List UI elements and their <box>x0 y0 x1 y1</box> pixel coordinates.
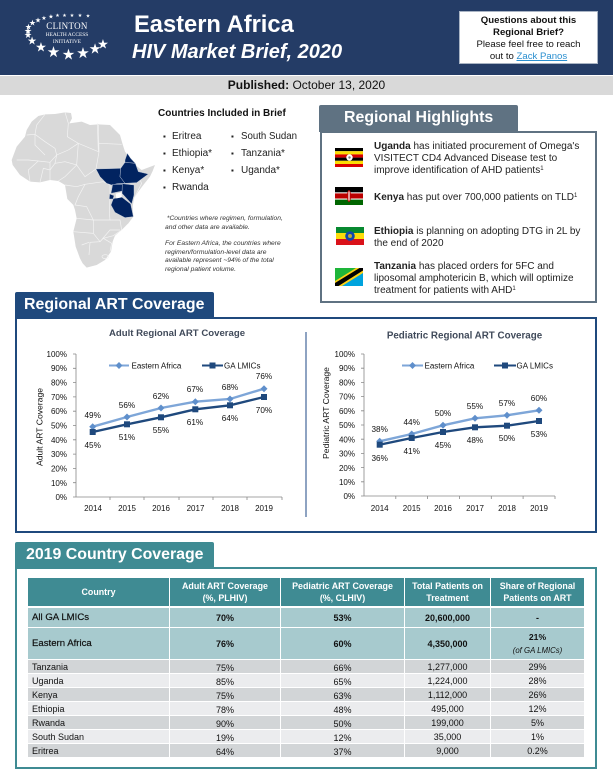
y axis: 90% <box>339 364 355 373</box>
row: Ethiopia: 495,000 <box>431 704 464 714</box>
footnote: data availability: and other data are available. <box>165 224 250 230</box>
row: Ethiopia: Ethiopia <box>32 704 65 714</box>
legend: Eastern Africa <box>424 362 475 370</box>
legend: GA LMICs <box>224 362 260 370</box>
heading: regional ART coverage <box>15 292 214 318</box>
y axis: 20% <box>51 464 67 474</box>
subtitle: HIV Market Brief, 2020 <box>132 41 342 63</box>
row: Ethiopia: 12% <box>528 704 546 714</box>
panel: regional highlights <box>320 131 597 303</box>
y axis: 100% <box>335 350 355 359</box>
legend <box>109 362 260 370</box>
countries list: ▪ <box>163 166 166 175</box>
table header: (%, PLHIV) <box>203 593 247 603</box>
y axis: 80% <box>339 378 355 388</box>
row: Tanzania: 29% <box>528 662 546 672</box>
x axis labels: 2019 <box>255 504 273 513</box>
header banner <box>0 0 613 75</box>
data labels: 45% <box>435 441 451 450</box>
row: Tanzania: 75% <box>216 663 234 673</box>
countries list: Tanzania* <box>241 148 285 159</box>
callout: questions contact <box>459 11 598 64</box>
y axis: 0% <box>343 492 355 501</box>
data labels: 60% <box>531 394 547 403</box>
heading: 2019 country coverage <box>15 542 214 568</box>
logo: Clinton Health Access Initiative: CLINTON <box>46 21 88 31</box>
table: country coverage <box>28 578 584 757</box>
countries list: South Sudan <box>241 131 297 142</box>
logo: Clinton Health Access Initiative: ★ <box>55 13 60 19</box>
table header: (%, CLHIV) <box>320 593 365 603</box>
row: Rwanda <box>28 716 584 729</box>
table header: Share of Regional <box>500 581 575 591</box>
published date band: Published: October 13, 2020 <box>228 78 385 92</box>
data labels: 70% <box>256 406 272 415</box>
y axis: 60% <box>339 407 355 416</box>
published date band <box>0 76 613 95</box>
row: Kenya: 63% <box>333 691 352 701</box>
logo: Clinton Health Access Initiative: ★ <box>86 14 91 20</box>
text: Tanzania highlight: Tanzania has placed orders for 5FC and <box>374 261 554 272</box>
y axis: 50% <box>339 421 355 430</box>
logo: Clinton Health Access Initiative: ★ <box>29 18 36 28</box>
legend: GA LMICs <box>516 362 553 370</box>
x axis labels: 2016 <box>152 504 170 513</box>
data labels: 67% <box>187 385 203 394</box>
row: Uganda: 65% <box>333 677 352 687</box>
row: Uganda: 1,224,000 <box>427 676 468 686</box>
y axis: 70% <box>339 392 355 402</box>
logo: Clinton Health Access Initiative: ★ <box>41 15 47 22</box>
title: Eastern Africa <box>134 12 294 38</box>
callout: questions contact: out to Zack Panos <box>490 51 567 62</box>
row: Rwanda: 5% <box>531 718 544 728</box>
y axis: 20% <box>339 464 355 473</box>
logo: Clinton Health Access Initiative: ★ <box>76 45 90 62</box>
footnote: patient volume: regional patient volume. <box>165 266 236 272</box>
callout: questions contact: Questions about this <box>481 15 576 26</box>
row: Kenya: 75% <box>216 691 234 701</box>
callout: questions contact: Regional Brief? <box>493 27 564 38</box>
data labels: 50% <box>499 434 515 443</box>
chart: adult regional ART coverage <box>34 328 282 513</box>
table header: Patients on ART <box>503 593 572 603</box>
data labels: 41% <box>404 447 420 456</box>
text: Uganda highlight <box>374 141 579 176</box>
row: All GA LMICs: 20,600,000 <box>425 612 470 622</box>
row: Eastern Africa: 4,350,000 <box>427 638 468 648</box>
legend <box>402 362 553 370</box>
row: South Sudan: South Sudan <box>32 732 84 742</box>
y axis: 90% <box>51 364 67 373</box>
table header: Country <box>81 587 116 597</box>
row: Eritrea: 64% <box>216 747 234 757</box>
row: Ethiopia: 78% <box>216 705 234 715</box>
data labels <box>372 394 547 463</box>
country borders <box>17 112 142 259</box>
divider between charts <box>305 332 306 517</box>
x axis labels: 2019 <box>530 504 548 513</box>
x axis labels: 2015 <box>118 504 136 513</box>
legend: Eastern Africa <box>132 362 182 370</box>
logo: Clinton Health Access Initiative: ★ <box>48 13 54 20</box>
logo: Clinton Health Access Initiative: HEALTH ACCESS <box>46 32 88 38</box>
countries list: ▪ <box>163 149 166 158</box>
text: Ethiopia highlight <box>374 226 580 249</box>
footnote: data availability <box>165 215 283 230</box>
x axis labels: 2017 <box>187 504 205 513</box>
row: Uganda: Uganda <box>32 676 64 686</box>
text: Kenya highlight: Kenya has put over 700,000 patients on TLD1 <box>374 192 577 203</box>
chart title: Pediatric Regional ART Coverage <box>387 330 543 342</box>
icon: Tanzania flag <box>335 268 363 286</box>
text: Uganda highlight: VISITECT CD4 Advanced Disease test to <box>374 153 557 164</box>
row: Eritrea <box>28 744 584 757</box>
data labels: 44% <box>404 418 420 427</box>
row: South Sudan: 1% <box>531 732 544 742</box>
row: Uganda: 85% <box>216 677 234 687</box>
panel: regional ART coverage <box>15 317 597 533</box>
table header: Treatment <box>426 593 469 603</box>
row: Tanzania <box>28 660 584 673</box>
row: Tanzania: Tanzania <box>32 662 68 672</box>
series: GA LMICs <box>90 394 267 435</box>
row: Eastern Africa: 21% <box>529 632 546 642</box>
logo: Clinton Health Access Initiative: ★ <box>35 40 47 54</box>
heading: regional highlights <box>319 105 518 132</box>
table header: Total Patients on <box>412 581 483 591</box>
data labels: 49% <box>85 411 101 420</box>
row: Eritrea: 0.2% <box>527 746 548 756</box>
row: Eastern Africa: (of GA LMICs) <box>513 646 562 654</box>
data labels: 56% <box>119 401 135 410</box>
footnote: patient volume <box>165 240 281 272</box>
logo: Clinton Health Access Initiative: ★ <box>70 13 75 19</box>
logo: Clinton Health Access Initiative: ★ <box>62 13 67 19</box>
text: Tanzania highlight <box>374 261 574 296</box>
countries list: Uganda* <box>241 165 280 176</box>
countries list: Ethiopia* <box>172 148 212 159</box>
logo: Clinton Health Access Initiative: ★ <box>24 26 32 36</box>
x axis labels: 2017 <box>466 504 484 513</box>
x axis labels <box>84 504 273 513</box>
row: All GA LMICs: - <box>536 612 539 622</box>
row: Rwanda: 199,000 <box>431 718 464 728</box>
y axis <box>335 350 555 501</box>
y axis: 60% <box>51 407 67 416</box>
logo: Clinton Health Access Initiative: ★ <box>24 30 32 40</box>
y axis: 100% <box>47 350 67 359</box>
data labels: 68% <box>222 383 238 392</box>
logo: Clinton Health Access Initiative <box>24 13 109 63</box>
row: South Sudan: 35,000 <box>434 732 461 742</box>
row: All GA LMICs: All GA LMICs <box>32 612 89 623</box>
row: Kenya: 26% <box>528 690 546 700</box>
data labels: 38% <box>372 425 388 434</box>
footnote: data availability: *Countries where regimen, formulation, <box>167 215 283 222</box>
logo: Clinton Health Access Initiative: ★ <box>89 41 101 57</box>
row: Eritrea: Eritrea <box>32 746 59 756</box>
y axis <box>47 350 282 502</box>
row: All GA LMICs <box>28 608 584 627</box>
row: Eastern Africa: 60% <box>333 638 352 648</box>
series: Eastern Africa <box>376 407 542 445</box>
series: Eastern Africa <box>89 385 268 430</box>
icon: Kenya flag <box>335 187 363 205</box>
text: Ethiopia highlight: the end of 2020 <box>374 238 444 249</box>
icon: Uganda flag <box>335 148 363 167</box>
footnote: patient volume: available represent ~94% of the total <box>165 257 274 264</box>
data labels: 76% <box>256 372 272 381</box>
map of Africa <box>12 112 155 268</box>
icon: Ethiopia flag <box>336 227 364 245</box>
heading: regional highlights: Regional Highlights <box>344 109 493 126</box>
y axis: 30% <box>51 450 67 459</box>
y axis: 10% <box>339 478 355 487</box>
table header: Pediatric ART Coverage <box>292 581 393 591</box>
text: Tanzania highlight: liposomal amphotericin B, which will optimize <box>374 273 574 284</box>
continent <box>12 112 155 268</box>
x axis labels: 2018 <box>498 504 516 513</box>
data labels: 64% <box>222 414 238 423</box>
data labels: 45% <box>85 441 101 450</box>
row: Rwanda: 90% <box>216 719 234 729</box>
data labels: 50% <box>435 409 451 418</box>
data labels: 57% <box>499 399 515 408</box>
y axis: 70% <box>51 393 67 402</box>
countries list: ▪ <box>231 166 234 175</box>
row: Rwanda: 50% <box>333 719 352 729</box>
data labels: 55% <box>467 402 483 411</box>
countries list: ▪ <box>231 149 234 158</box>
text: Ethiopia highlight: Ethiopia is planning on adopting DTG in 2L by <box>374 226 580 237</box>
y axis: 80% <box>51 378 67 388</box>
countries list: Eritrea <box>172 131 201 142</box>
row: South Sudan <box>28 730 584 743</box>
row: Kenya: Kenya <box>32 690 58 700</box>
logo: Clinton Health Access Initiative: ★ <box>97 36 109 52</box>
logo: Clinton Health Access Initiative: ★ <box>62 46 75 63</box>
row: South Sudan: 19% <box>216 733 234 743</box>
y axis: 30% <box>339 450 355 458</box>
table header <box>28 578 584 606</box>
list items: ▪ <box>163 132 166 141</box>
row: Uganda: 28% <box>528 676 546 686</box>
logo: Clinton Health Access Initiative: ★ <box>78 13 83 19</box>
y axis: 40% <box>339 436 355 444</box>
row: Tanzania: 66% <box>333 663 352 673</box>
panel: 2019 country coverage <box>15 567 597 769</box>
y axis title: Pediatric ART Coverage <box>321 367 331 459</box>
x axis labels: 2016 <box>434 504 452 513</box>
footnote: patient volume: regimen/formulation-level data are <box>165 248 266 256</box>
text: Uganda highlight: improve identification of AHD patients1 <box>374 165 544 176</box>
row: Eritrea: 9,000 <box>436 746 459 756</box>
logo: Clinton Health Access Initiative: INITIATIVE <box>53 39 82 45</box>
row: All GA LMICs: 70% <box>216 612 234 622</box>
x axis labels: 2015 <box>403 504 421 513</box>
y axis title: Adult ART Coverage <box>34 388 44 466</box>
countries list: Kenya* <box>172 165 204 176</box>
y axis: 40% <box>51 436 67 445</box>
logo: Clinton Health Access Initiative: ★ <box>47 44 60 61</box>
text: Tanzania highlight: treatment for patients with AHD1 <box>374 285 516 296</box>
row: Eastern Africa <box>28 628 584 659</box>
row: Kenya: 1,112,000 <box>428 690 467 700</box>
row: Rwanda: Rwanda <box>32 718 65 728</box>
row: Kenya <box>28 688 584 701</box>
row: Tanzania: 1,277,000 <box>427 662 468 672</box>
x axis labels: 2014 <box>84 504 102 513</box>
row: Eastern Africa: Eastern Africa <box>32 638 92 649</box>
row: Ethiopia <box>28 702 584 715</box>
y axis: 0% <box>55 493 67 502</box>
footnote: patient volume: For Eastern Africa, the countries where <box>165 240 281 247</box>
data labels <box>85 372 272 450</box>
row: South Sudan: 12% <box>333 733 352 743</box>
text: Uganda highlight: Uganda has initiated procurement of Omega's <box>374 141 579 152</box>
y axis: 10% <box>51 479 67 488</box>
logo: Clinton Health Access Initiative: ★ <box>27 36 37 48</box>
data labels: 61% <box>187 418 203 427</box>
countries list <box>158 108 297 193</box>
chart title: Adult Regional ART Coverage <box>109 328 245 339</box>
x axis labels: 2018 <box>221 504 239 513</box>
row: Uganda <box>28 674 584 687</box>
table header: Adult ART Coverage <box>182 581 268 591</box>
countries list: ▪ <box>163 183 166 192</box>
data labels: 55% <box>153 426 169 435</box>
Lake Victoria <box>116 192 122 198</box>
y axis: 50% <box>51 422 67 430</box>
chart: pediatric regional ART coverage <box>321 330 556 513</box>
highlighted Eastern Africa countries <box>96 153 148 218</box>
row: All GA LMICs: 53% <box>333 612 352 622</box>
row: Eritrea: 37% <box>333 747 352 757</box>
data labels: 51% <box>119 433 135 442</box>
x axis labels: 2014 <box>371 504 389 513</box>
heading: regional ART coverage: Regional ART Coverage <box>24 296 204 313</box>
data labels: 62% <box>153 392 169 401</box>
row: Eastern Africa: 76% <box>216 638 234 648</box>
callout: questions contact: Please feel free to reach <box>476 39 580 50</box>
logo: Clinton Health Access Initiative: ★ <box>35 16 41 24</box>
countries list: ▪ <box>231 132 234 141</box>
row: Ethiopia: 48% <box>333 705 352 715</box>
data labels: 48% <box>467 436 483 445</box>
data labels: 53% <box>531 430 547 439</box>
series: GA LMICs <box>377 418 542 448</box>
countries list: Rwanda <box>172 182 209 193</box>
heading: 2019 country coverage: 2019 Country Coverage <box>26 546 204 563</box>
x axis labels <box>371 504 548 513</box>
list heading: Countries Included in Brief <box>158 108 286 119</box>
data labels: 36% <box>372 454 388 463</box>
logo: Clinton Health Access Initiative: ★ <box>25 22 32 32</box>
